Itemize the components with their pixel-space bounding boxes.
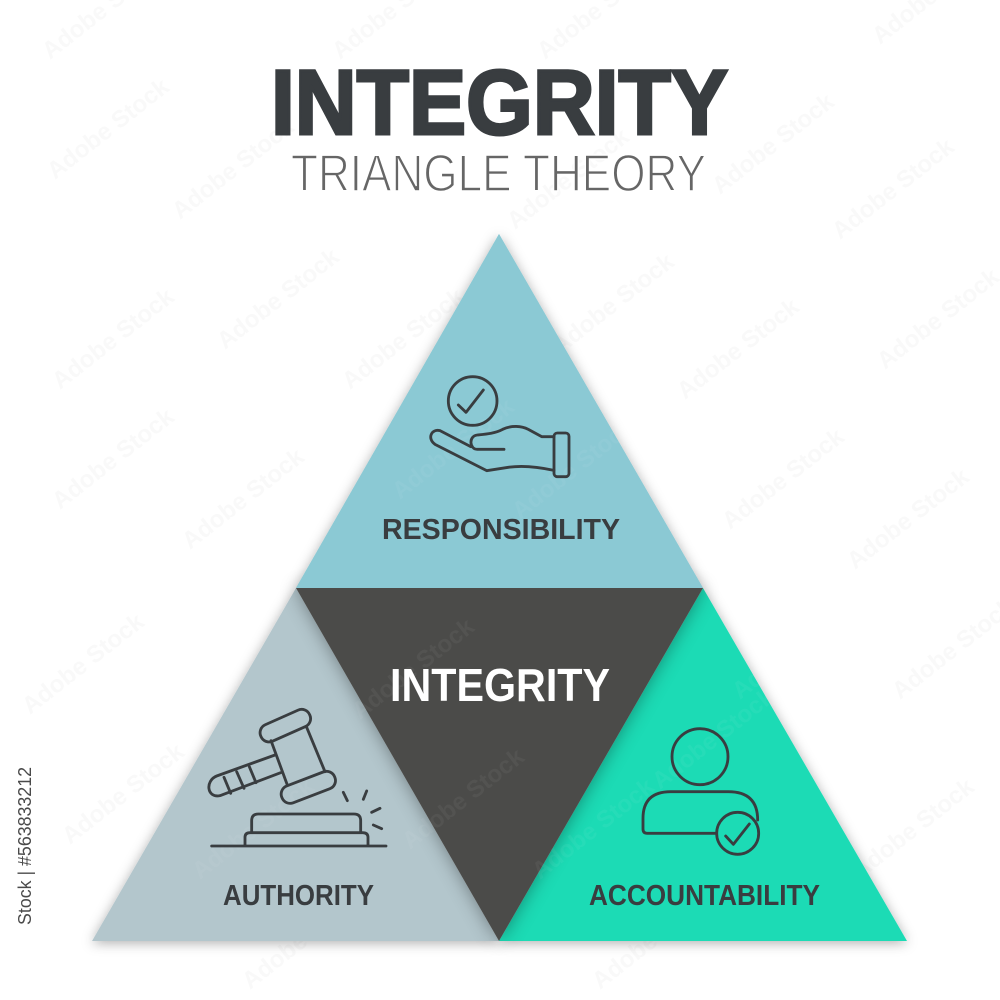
text: Adobe Stock [42,73,175,185]
text: Adobe Stock [527,773,660,885]
text: Adobe Stock [387,393,520,505]
panel: responsibility [296,234,703,588]
text: Adobe Stock [337,283,470,395]
panel: authority [92,588,499,941]
text: Adobe Stock [672,293,805,405]
stock id: Stock | #563833212 [15,767,35,925]
text: Adobe Stock [167,113,300,225]
text: Adobe Stock [47,403,180,515]
icon: hand holding check [431,377,569,477]
text: Adobe Stock [397,743,530,855]
text: Adobe Stock [237,883,370,995]
text: Adobe Stock [177,443,310,555]
text: Adobe Stock [502,123,635,235]
text: Adobe Stock [57,738,190,850]
panel: integrity centre [296,588,703,941]
left triangle [92,588,499,941]
text: Adobe Stock [647,683,780,795]
text: Adobe Stock [827,133,960,245]
centre triangle [296,588,703,941]
text: Adobe Stock [212,243,345,355]
text: Adobe Stock [507,413,640,525]
title: INTEGRITY [271,52,728,154]
text: Adobe Stock [842,463,975,575]
text: Adobe Stock [47,283,180,395]
text: Adobe Stock [17,608,150,720]
subtitle: TRIANGLE THEORY [291,145,706,203]
label: authority: AUTHORITY [223,880,374,912]
text: Adobe Stock [847,773,980,885]
label: accountability: ACCOUNTABILITY [589,880,820,912]
text: Adobe Stock [727,593,860,705]
text: Adobe Stock [347,613,480,725]
text: Adobe Stock [187,773,320,885]
text: Adobe Stock [717,423,850,535]
text: Adobe Stock [547,248,680,360]
text: Adobe Stock [707,88,840,200]
label: integrity: INTEGRITY [390,659,610,711]
right triangle [499,588,907,941]
icon: person with check [643,729,759,854]
label: responsibility: RESPONSIBILITY [382,514,620,546]
icon: gavel [209,707,386,846]
text: Adobe Stock [587,883,720,995]
panel: accountability [499,588,907,941]
top triangle [296,234,703,588]
panel: responsibility shadow [296,234,703,588]
